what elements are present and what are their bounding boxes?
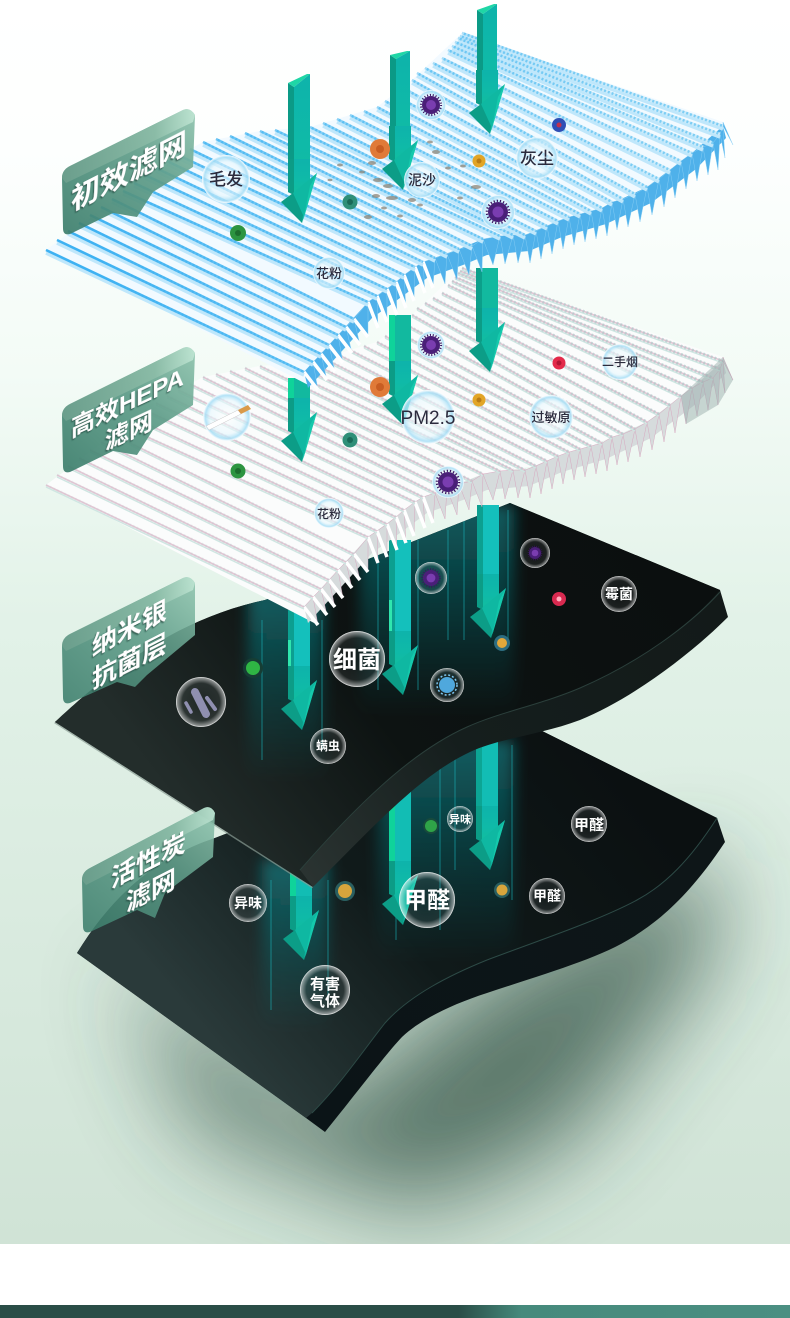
dot: red — [552, 592, 566, 606]
arrows: layer 3 — [281, 505, 506, 730]
bubble: formaldehyde — [571, 806, 607, 842]
bubble: harmful gas: 有害 — [310, 975, 340, 993]
label: primary filter: 初效滤网 — [71, 126, 187, 218]
bubble: mites — [310, 728, 346, 764]
bottom bar — [0, 1305, 790, 1318]
bubble: odor: 异味 — [234, 895, 262, 911]
bubble: pollen: 花粉 — [316, 266, 342, 281]
bubble: allergen: 过敏原 — [531, 410, 571, 425]
dot: green — [423, 818, 439, 834]
arrow C — [469, 4, 505, 134]
bubble: hair: 毛发 — [209, 170, 243, 189]
bubble: formaldehyde: 甲醛 — [533, 888, 561, 904]
panel: nano silver sheet — [55, 503, 728, 887]
bubble: pollen — [313, 257, 345, 289]
bubble: virus — [416, 90, 446, 120]
arrow B — [382, 540, 418, 695]
dot: yellow — [494, 635, 510, 651]
arrow C — [470, 505, 506, 638]
bubble: cigarette — [203, 393, 251, 441]
bubble: odor — [447, 806, 473, 832]
arrow B — [382, 780, 418, 925]
label: nano silver: 纳米银 — [92, 595, 167, 662]
bubble: odor — [229, 884, 267, 922]
dot: yellow — [335, 881, 355, 901]
arrow B — [382, 51, 418, 190]
bubble: hair — [202, 155, 250, 203]
bubble: PM2.5: PM2.5 — [401, 408, 455, 429]
bubble: harmful gas: 气体 — [310, 992, 340, 1010]
bubble: mites: 螨虫 — [316, 738, 340, 753]
bubble: allergen — [529, 395, 573, 439]
bubbles: HEPA filter — [203, 331, 638, 528]
bubbles: primary filter — [202, 90, 566, 289]
sheet shadow — [120, 850, 715, 1210]
bubble: PM2.5 — [401, 390, 455, 444]
label: HEPA filter: 高效HEPA — [71, 363, 184, 443]
dot: gold — [472, 154, 486, 168]
bubble: virus — [520, 538, 550, 568]
dot: orange — [370, 139, 390, 159]
bubble: formaldehyde: 甲醛 — [574, 817, 604, 834]
label: activated carbon: 滤网 — [126, 864, 176, 918]
label: HEPA filter: 滤网 — [105, 407, 153, 456]
bubble: virus — [417, 331, 445, 359]
dust particles — [328, 140, 481, 219]
bubbles: nano silver layer — [176, 538, 637, 764]
bubble: dust: 灰尘 — [520, 149, 554, 168]
arrow C — [469, 725, 505, 870]
arrow A — [283, 850, 319, 960]
bubble: pollen: 花粉 — [317, 506, 341, 521]
label: nano silver — [62, 577, 195, 703]
panel: activated carbon sheet — [77, 720, 725, 1132]
bubble: bacteria: 细菌 — [333, 647, 381, 674]
arrow C — [469, 268, 505, 372]
bubble: virus — [432, 466, 464, 498]
bubble: blue germ — [430, 668, 464, 702]
label: activated carbon: 活性炭 — [111, 827, 186, 894]
bubble: harmful gas — [300, 965, 350, 1015]
bubble: mud — [404, 162, 440, 198]
arrow A — [281, 378, 317, 462]
bubbles: carbon layer — [229, 806, 607, 1015]
arrow B — [382, 315, 418, 425]
arrows: layer 2 — [281, 268, 505, 462]
bubble: virus — [415, 562, 447, 594]
arrows: layer 4 — [283, 725, 505, 960]
panel: HEPA sheet — [46, 268, 733, 625]
dot: blue — [552, 118, 566, 132]
bubble: mold — [601, 576, 637, 612]
bubble: second-hand smoke: 二手烟 — [602, 354, 638, 369]
bubble: dust — [516, 137, 558, 179]
label: activated carbon — [82, 807, 215, 932]
arrow A — [281, 74, 317, 223]
panel: primary filter sheet — [46, 33, 733, 390]
arrows: layer 1 — [281, 4, 505, 223]
dot: teal — [342, 194, 358, 210]
dot: yellow — [494, 882, 510, 898]
label: HEPA filter — [62, 347, 195, 472]
bubble: germs — [176, 677, 226, 727]
dot: green — [243, 658, 263, 678]
dot: teal — [342, 432, 358, 448]
dot: green — [230, 464, 246, 478]
bubble: bacteria — [329, 631, 385, 687]
label: primary filter — [62, 109, 195, 234]
bubble: odor: 异味 — [449, 812, 471, 826]
bubble: large virus — [481, 195, 515, 229]
bubble: formaldehyde large: 甲醛 — [404, 887, 450, 913]
dot: gold — [472, 394, 486, 406]
arrow A — [281, 610, 317, 730]
bubble: second-hand smoke — [602, 344, 638, 380]
bubble: formaldehyde — [529, 878, 565, 914]
bubble: mud: 泥沙 — [408, 172, 436, 188]
bubble: formaldehyde large — [399, 872, 455, 928]
dot: orange — [370, 377, 390, 397]
white gap — [0, 1244, 790, 1305]
bubble: mold: 霉菌 — [605, 586, 633, 602]
label: nano silver: 抗菌层 — [92, 628, 167, 695]
bubble: pollen — [314, 498, 344, 528]
dot: green — [230, 225, 246, 241]
dot: red — [552, 356, 566, 370]
